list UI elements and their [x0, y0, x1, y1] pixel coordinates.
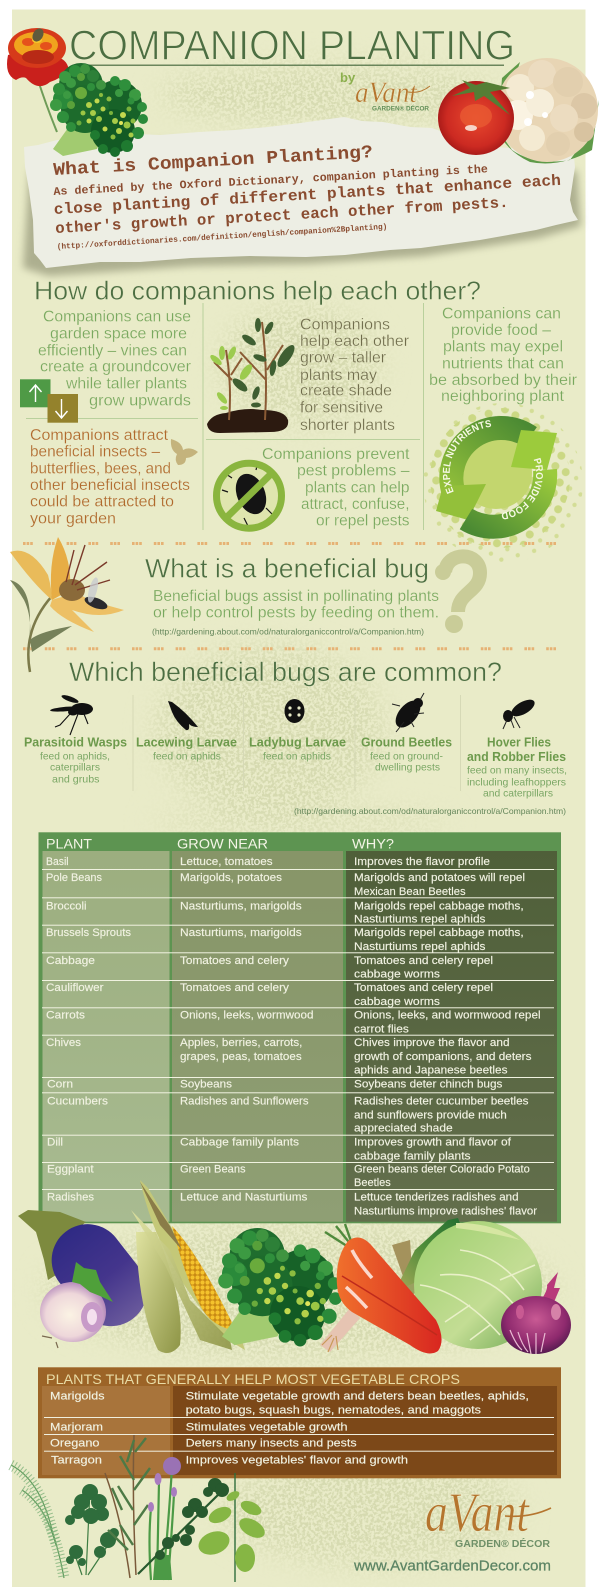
bug feeding descriptions: and grubs [52, 774, 100, 786]
column: why: Onions, leeks, and wormwood repel [354, 1009, 541, 1021]
column: plant: Corn [47, 1078, 73, 1090]
plant benefits: Stimulates vegetable growth [186, 1422, 348, 1434]
text block: beneficial insects: Companions attract [30, 427, 169, 444]
text block: provide food: nutrients that can [442, 355, 564, 372]
vegetable: leek [392, 1218, 470, 1295]
column: plant: Pole Beans [46, 872, 102, 884]
column: why: Nasturtiums repel aphids [354, 913, 486, 925]
column: grow near: Tomatoes and celery [180, 982, 289, 994]
bug column dividers [132, 695, 461, 791]
text block: help each other grow: Companions [300, 316, 390, 333]
icon: butterfly [171, 439, 198, 465]
plant benefits: Deters many insects and pests [186, 1438, 357, 1450]
text block: help each other grow: shorter plants [300, 417, 395, 434]
brown table: plants that help most crops [38, 1367, 561, 1478]
heading: which beneficial bugs are common: Which beneficial bugs are common? [69, 657, 502, 687]
bug names: Parasitoid Wasps [24, 735, 127, 750]
column: why: Marigolds and potatoes will repel [354, 872, 525, 884]
definition text: close planting of different plants that enhance each [53, 172, 561, 219]
text block: help each other grow: plants may [300, 367, 377, 384]
icon: lacewing larva [168, 701, 198, 730]
column: why: Soybeans deter chinch bugs [354, 1078, 503, 1090]
text block: beneficial bugs definition [153, 588, 439, 622]
icon: tomato [438, 80, 514, 155]
icon: cauliflower [496, 58, 599, 164]
column: why: cabbage worms [354, 996, 441, 1008]
column: why: Nasturtiums repel aphids [354, 941, 486, 953]
icon: nutrient cycle [424, 403, 582, 562]
definition text: other's growth or protect each other from pests. [55, 194, 509, 238]
text block: beneficial bugs definition: or help control pests by feeding on them. [153, 605, 439, 622]
table header: PLANT [46, 835, 92, 851]
column: why: Mexican Bean Beetles [354, 886, 466, 898]
title: COMPANION PLANTING [69, 22, 515, 68]
herbs illustration [11, 1435, 268, 1582]
column: grow near: Onions, leeks, wormwood [180, 1009, 314, 1021]
title underline [80, 65, 504, 66]
column: plant: Cucumbers [47, 1095, 109, 1107]
bug names [24, 735, 566, 764]
column: why: Improves growth and flavor of [354, 1137, 512, 1149]
icon: lily flower with bee [10, 537, 124, 672]
icon: ladybug larva [284, 699, 304, 723]
plant benefits: potato bugs, squash bugs, nematodes, and maggots [186, 1404, 482, 1416]
column: why: Green beans deter Colorado Potato [354, 1163, 530, 1175]
text block: prevent pests [262, 446, 410, 530]
plant names: Oregano [50, 1438, 100, 1450]
heading: what is a beneficial bug: What is a beneficial bug [145, 553, 429, 583]
icon: up and down arrows [20, 379, 78, 423]
definition text [53, 163, 561, 238]
text block: prevent pests: Companions prevent [262, 446, 410, 463]
text block: help each other grow: grow – taller [300, 350, 387, 367]
column: grow near: grapes, peas, tomatoes [180, 1051, 302, 1063]
herb: tarragon [105, 1435, 150, 1578]
icon: parasitoid wasp [50, 694, 93, 735]
bug feeding descriptions: feed on ground- [370, 751, 443, 763]
herb: oregano [195, 1473, 268, 1582]
text block: beneficial insects: could be attracted to [30, 494, 174, 511]
torn paper callout [23, 117, 581, 276]
vegetable: corn [131, 1180, 245, 1353]
website url: www.AvantGardenDecor.com [353, 1558, 551, 1575]
icon: nutrient cycle: PROVIDE FOOD [502, 458, 543, 520]
table header [46, 835, 394, 851]
vegetable: cabbage [414, 1221, 542, 1349]
text block: beneficial insects: butterflies, bees, and [30, 460, 171, 477]
herb: parsley [65, 1484, 119, 1575]
text block: beneficial insects: your garden [30, 510, 116, 527]
bug feeding descriptions: feed on many insects, [467, 765, 567, 777]
byline logo: aVant [355, 76, 418, 109]
column: grow near: Tomatoes and celery [180, 955, 289, 967]
column: why: Tomatoes and celery repel [354, 982, 493, 994]
column: why: and sunflowers provide much [354, 1109, 507, 1121]
source url: (http://gardening.about.com/od/naturalorganiccontrol/a/Companion.htm) [294, 806, 566, 816]
column: plant: Cauliflower [46, 982, 104, 994]
column: grow near: Lettuce, tomatoes [180, 856, 273, 868]
column: grow near: Soybeans [180, 1078, 233, 1090]
text block: provide food: Companions can [442, 305, 561, 322]
footer logo: GARDEN® DÉCOR [455, 1537, 551, 1550]
plant benefits: Stimulate vegetable growth and deters bean beetles, aphids, [186, 1390, 529, 1402]
column: plant: Basil [46, 856, 69, 868]
text block: prevent pests: plants can help [305, 479, 410, 496]
text block: garden space: garden space more [50, 325, 187, 342]
bug feeding descriptions: and caterpillars [483, 788, 553, 800]
column: plant: Dill [47, 1137, 63, 1149]
plant benefits [186, 1390, 529, 1466]
table heading: PLANTS THAT GENERALLY HELP MOST VEGETABLE CROPS [46, 1371, 460, 1387]
bug feeding descriptions: dwelling pests [375, 762, 440, 774]
row rules [44, 1417, 554, 1452]
vegetable: onion [501, 1272, 571, 1354]
herb: flat parsley [138, 1478, 229, 1574]
bug feeding descriptions [40, 751, 567, 800]
column: grow near: Apples, berries, carrots, [180, 1037, 302, 1049]
text block: help each other grow: help each other [300, 333, 410, 350]
question mark graphic [435, 556, 480, 633]
column: plant: Cabbage [46, 955, 95, 967]
bug names: Lacewing Larvae [136, 735, 237, 750]
plant names: Marigolds [50, 1390, 105, 1402]
heading: what is companion planting: What is Companion Planting? [53, 143, 373, 181]
text block: help each other grow [300, 316, 410, 434]
text block: beneficial insects: other beneficial insects [30, 477, 190, 494]
column: why: growth of companions, and deters [354, 1051, 532, 1063]
column: grow near: Radishes and Sunflowers [180, 1095, 309, 1107]
companion planting table [38, 832, 561, 1223]
column: plant: Chives [46, 1037, 82, 1049]
text block: provide food: be absorbed by their [429, 372, 578, 389]
column: why [354, 856, 541, 1218]
column: why: Improves the flavor profile [354, 856, 490, 868]
vegetable: turnip [40, 1262, 113, 1348]
text block: garden space [38, 309, 192, 410]
text block: prevent pests: pest problems – [297, 463, 410, 480]
table header: WHY? [352, 835, 394, 851]
column: plant: Brussels Sprouts [46, 927, 131, 939]
column: why: Marigolds repel cabbage moths, [354, 900, 524, 912]
dashed separators [23, 544, 565, 649]
icon: marigold [7, 26, 69, 132]
source url: (http://gardening.about.com/od/naturalorganiccontrol/a/Companion.htm) [152, 626, 424, 636]
herb: rosemary [11, 1465, 64, 1578]
column: why: Nasturtiums improve radishes' flavor [354, 1206, 537, 1218]
bug names: Ladybug Larvae [249, 735, 346, 750]
column: why: Marigolds repel cabbage moths, [354, 927, 524, 939]
text block: beneficial insects: beneficial insects – [30, 444, 160, 461]
table row rules [42, 869, 554, 1190]
herb: chives [148, 1457, 181, 1580]
column: why: Lettuce tenderizes radishes and [354, 1192, 519, 1204]
bug feeding descriptions: feed on aphids [153, 751, 221, 763]
column: plant: Eggplant [47, 1163, 94, 1175]
dividers [26, 303, 424, 530]
text block: prevent pests: attract, confuse, [301, 496, 410, 513]
text block: garden space: Companions can use [43, 309, 191, 326]
text block: prevent pests: or repel pests [316, 513, 410, 530]
vegetable: carrots [320, 1224, 442, 1353]
column: why: Radishes deter cucumber beetles [354, 1095, 529, 1107]
vegetable: broccoli [218, 1228, 342, 1346]
text block: help each other grow: for sensitive [300, 400, 383, 417]
source url: (http://oxforddictionaries.com/definition/english/companion%2Bplanting) [57, 223, 388, 252]
column: plant: Carrots [46, 1009, 86, 1021]
text block: beneficial bugs definition: Beneficial bugs assist in pollinating plants [153, 588, 439, 605]
byline logo: by [340, 70, 356, 85]
footer logo: aVant [425, 1482, 530, 1544]
plant benefits: Improves vegetables' flavor and growth [186, 1454, 408, 1466]
column: plant: Radishes [47, 1192, 95, 1204]
table header: GROW NEAR [177, 835, 268, 851]
column: why: carrot flies [354, 1023, 409, 1035]
icon: hover fly [503, 696, 537, 729]
bug feeding descriptions: caterpillars [50, 762, 100, 774]
column: grow near: Nasturtiums, marigolds [180, 927, 302, 939]
text block: provide food [429, 305, 578, 405]
column: why: Chives improve the flavor and [354, 1037, 510, 1049]
column: grow near: Marigolds, potatoes [180, 872, 283, 884]
text block: garden space: grow upwards [89, 393, 191, 410]
byline logo: GARDEN® DÉCOR [372, 104, 430, 112]
column: grow near: Cabbage family plants [180, 1137, 300, 1149]
icon: ground beetle [391, 693, 425, 732]
text block: beneficial insects [30, 427, 190, 527]
column: grow near: Nasturtiums, marigolds [180, 900, 302, 912]
plant names: Marjoram [50, 1422, 103, 1434]
bug names: and Robber Flies [467, 749, 566, 764]
text block: provide food: plants may expel [443, 339, 563, 356]
text block: garden space: efficiently – vines can [38, 343, 187, 360]
vegetable: eggplant [18, 1210, 162, 1341]
bug feeding descriptions: feed on aphids, [40, 751, 110, 763]
column: why: Tomatoes and celery repel [354, 955, 493, 967]
icon: seedlings in soil [207, 318, 298, 433]
heading: how do companions help: How do companions help each other? [34, 275, 481, 305]
column: grow near [180, 856, 314, 1204]
column: why: appreciated shade [354, 1123, 453, 1135]
column: why: aphids and Japanese beetles [354, 1064, 508, 1076]
column: why: Beetles [354, 1177, 391, 1189]
column: plant [46, 856, 131, 1204]
text block: provide food: provide food – [451, 322, 551, 339]
text block: provide food: neighboring plant [441, 388, 565, 405]
icon: nutrient cycle: EXPEL NUTRIENTS [442, 420, 492, 494]
column: grow near: Green Beans [180, 1163, 246, 1175]
byline logo [340, 70, 430, 112]
column: plant: Broccoli [46, 900, 87, 912]
text block: help each other grow: create shade [300, 383, 392, 400]
bug names: Ground Beetles [361, 735, 452, 750]
column: why: cabbage worms [354, 968, 441, 980]
bug feeding descriptions: including leafhoppers [467, 777, 566, 789]
definition text: As defined by the Oxford Dictionary, companion planting is the [53, 163, 488, 199]
icon: no bugs sign [216, 462, 282, 528]
column: why: cabbage family plants [354, 1150, 471, 1162]
plant names [50, 1390, 105, 1466]
column: grow near: Lettuce and Nasturtiums [180, 1192, 308, 1204]
bug names: Hover Flies [487, 735, 551, 750]
plant names: Tarragon [51, 1454, 102, 1466]
icon: broccoli [50, 63, 148, 157]
text block: garden space: while taller plants [65, 375, 187, 392]
text block: garden space: create a groundcover [40, 359, 192, 376]
bug feeding descriptions: feed on aphids [263, 751, 331, 763]
